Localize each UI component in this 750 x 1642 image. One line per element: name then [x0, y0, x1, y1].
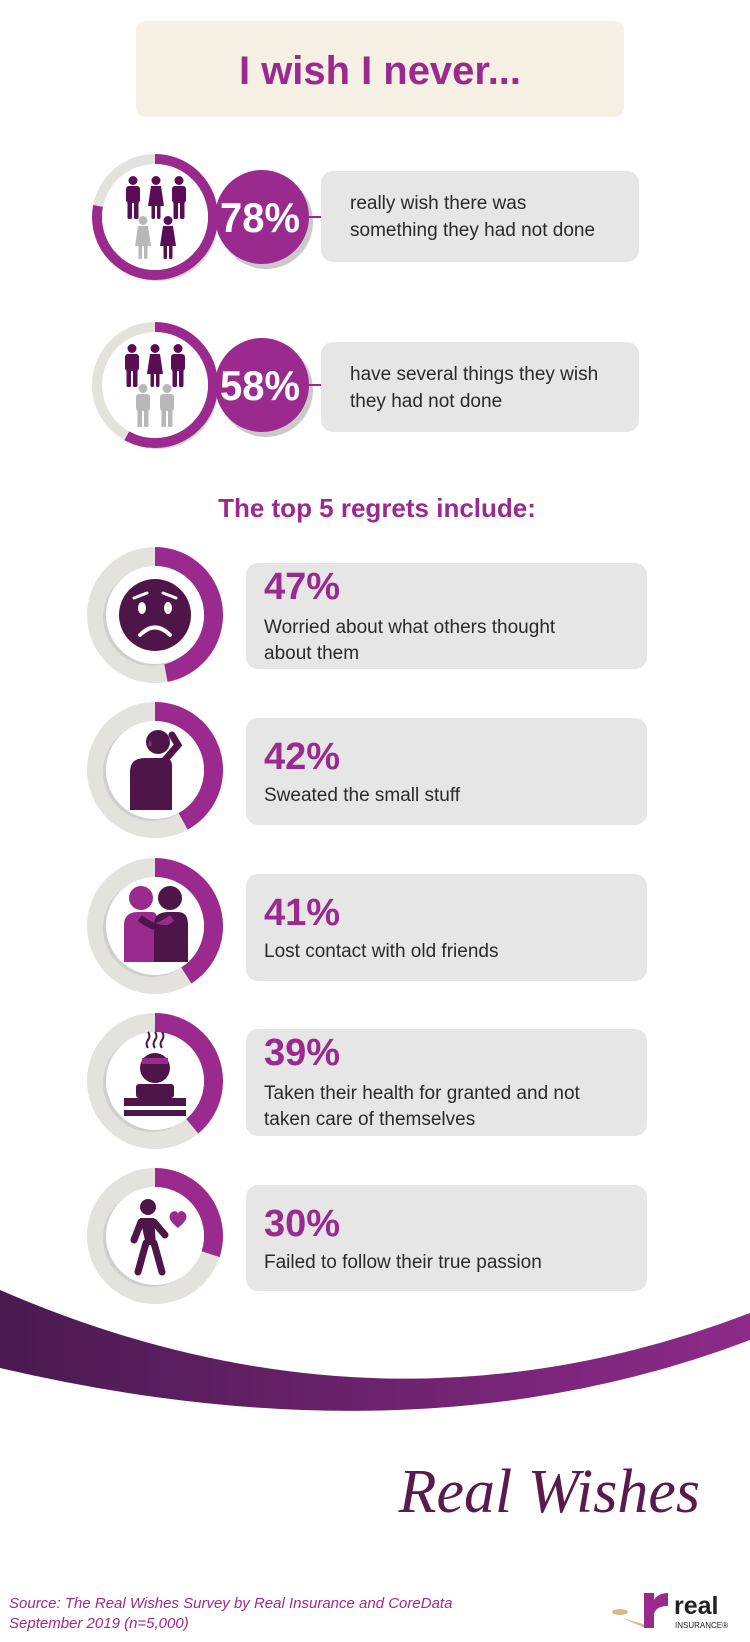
donut: walking to heart	[87, 1168, 223, 1304]
text box: 58%	[321, 342, 639, 432]
text box: 42%: Sweated the small stuff	[264, 785, 461, 806]
regret 5: 30%	[87, 1168, 647, 1304]
source note: Source: The Real Wishes Survey by Real Insurance and CoreData	[9, 1595, 452, 1612]
logo: real insurance: INSURANCE®	[675, 1621, 728, 1630]
text box: 47%: about them	[264, 643, 359, 664]
badge: 78%	[215, 170, 321, 269]
regret 1: 47%	[87, 547, 647, 683]
text box: 47%: 47%	[264, 566, 340, 608]
regret 2: 42%	[87, 702, 647, 838]
regret 3: 41%	[87, 858, 647, 994]
title panel: I wish I never...	[239, 49, 521, 93]
source note: September 2019 (n=5,000)	[9, 1615, 189, 1632]
swoosh band	[0, 1290, 750, 1411]
title panel	[136, 21, 624, 117]
text box: 78%	[321, 171, 639, 262]
text box: 58%: they had not done	[350, 391, 502, 412]
badge: 58%	[215, 338, 321, 437]
text box: 30%	[246, 1185, 647, 1291]
badge: 78%: 78%	[220, 194, 300, 241]
donut: worried face	[87, 547, 223, 683]
text box: 47%	[246, 563, 647, 669]
donut: sick in bed	[87, 1013, 223, 1149]
text box: 41%: Lost contact with old friends	[264, 941, 498, 962]
logo: real insurance: real	[674, 1592, 718, 1620]
badge: 58%: 58%	[220, 362, 300, 409]
text box: 41%: 41%	[264, 892, 340, 934]
text box: 30%: Failed to follow their true passion	[264, 1252, 542, 1273]
text box: 42%	[246, 718, 647, 825]
text box: 39%: 39%	[264, 1032, 340, 1074]
regret 4: 39%	[87, 1013, 647, 1149]
text box: 39%	[246, 1029, 647, 1136]
brand script: Real Wishes: Real Wishes	[398, 1458, 700, 1526]
text box: 42%: 42%	[264, 736, 340, 778]
text box: 78%: something they had not done	[350, 220, 595, 241]
text box: 78%: really wish there was	[350, 193, 526, 214]
text box: 41%	[246, 874, 647, 981]
donut: 58% people	[97, 327, 218, 449]
donut: 78% people	[97, 159, 218, 281]
text box: 39%: taken care of themselves	[264, 1109, 475, 1130]
heading: top 5 regrets: The top 5 regrets include:	[218, 493, 536, 523]
text box: 39%: Taken their health for granted and not	[264, 1083, 581, 1104]
logo: real insurance	[612, 1592, 728, 1630]
text box: 58%: have several things they wish	[350, 364, 598, 385]
text box: 30%: 30%	[264, 1203, 340, 1245]
donut: two friends	[87, 858, 223, 994]
donut: sweating person	[87, 702, 223, 838]
stat row: 78%	[97, 159, 639, 281]
text box: 47%: Worried about what others thought	[264, 617, 556, 638]
stat row: 58%	[97, 327, 639, 449]
